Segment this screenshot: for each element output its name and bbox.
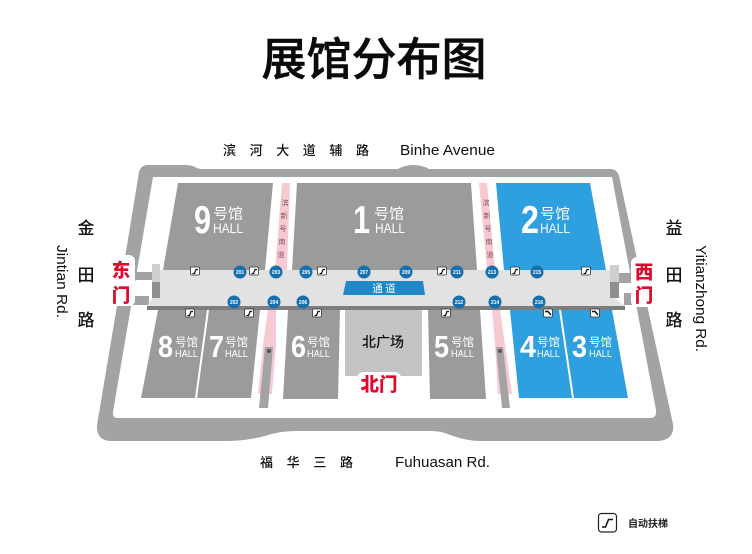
hall 2: 2 <box>521 199 539 242</box>
hall 5: HALL <box>451 349 474 360</box>
hall 5: 号馆 <box>451 334 474 350</box>
pedestrian road east: 新 <box>484 211 490 221</box>
hall 6: 号馆 <box>307 334 330 350</box>
road label: Yitianzhong Rd: 田 <box>666 261 682 286</box>
gate numbers upper row: 205 <box>302 270 310 276</box>
hall 6: 6 <box>291 329 306 364</box>
hall 8: 号馆 <box>175 334 198 350</box>
escalator icons <box>186 267 600 317</box>
gate numbers upper row <box>234 266 544 278</box>
road label: Jintian Rd: 金 <box>78 214 94 239</box>
pedestrian road west: 号 <box>280 224 286 234</box>
legend: escalator <box>598 514 668 532</box>
site interior <box>113 177 656 418</box>
gate numbers upper row: 215 <box>533 270 541 276</box>
hall 1: HALL <box>375 221 405 236</box>
east gate: 东 <box>112 257 130 283</box>
entrance block west <box>610 265 619 298</box>
site ring road <box>97 165 673 441</box>
connector east gate <box>133 272 153 305</box>
gate numbers lower row: 202 <box>230 300 238 306</box>
road label: Yitianzhong Rd: 益 <box>666 214 682 239</box>
hall 5 <box>428 310 486 399</box>
road label: Jintian Rd: Jintian Rd. <box>53 245 69 318</box>
gate numbers lower row: 216 <box>535 300 543 306</box>
east gate: 门 <box>112 282 130 308</box>
hall 6: HALL <box>307 349 330 360</box>
hall 7: HALL <box>225 349 248 360</box>
hall 2 <box>496 183 606 270</box>
road label: Yitianzhong Rd: Yitianzhong Rd. <box>692 245 708 352</box>
hall 8 <box>141 310 207 398</box>
road label: Binhe Avenue <box>223 140 495 159</box>
pedestrian road east <box>479 183 495 270</box>
road label: Binhe Avenue: Binhe Avenue <box>400 143 495 159</box>
pedestrian road west: 南 <box>278 237 286 247</box>
hall 9: 号馆 <box>213 203 243 224</box>
pedestrian road west: 新 <box>280 211 288 221</box>
pedestrian road west: 滨 <box>282 198 288 208</box>
hall 9: 9 <box>194 199 211 242</box>
ramp west <box>258 310 276 408</box>
road label: Fuhuasan Rd <box>260 452 490 471</box>
road label: Binhe Avenue: 滨 河 大 道 辅 路 <box>223 140 369 159</box>
west gate: 门 <box>635 282 653 308</box>
legend: escalator: 自动扶梯 <box>628 515 668 530</box>
gate numbers upper row: 203 <box>272 270 280 276</box>
gate numbers upper row: 209 <box>402 270 410 276</box>
gate numbers lower row: 204 <box>270 300 278 306</box>
gate numbers upper row: 201 <box>236 270 244 276</box>
hall 7: 号馆 <box>225 334 248 350</box>
hall 8: 8 <box>158 329 173 364</box>
road label: Jintian Rd: 田 <box>78 261 94 286</box>
hall 6 <box>283 310 340 399</box>
hall 1: 号馆 <box>374 203 404 224</box>
road label: Jintian Rd <box>53 214 94 331</box>
pedestrian road west: 道 <box>278 250 284 260</box>
gate numbers lower row: 214 <box>491 300 499 306</box>
entrance block east <box>152 264 160 298</box>
road label: Fuhuasan Rd: 福 华 三 路 <box>260 452 353 471</box>
hall 3: HALL <box>589 349 612 360</box>
pedestrian road west <box>275 183 290 270</box>
pedestrian road east: 滨 <box>482 198 490 208</box>
hall 1 <box>292 183 477 270</box>
gate numbers lower row: 212 <box>455 300 463 306</box>
gate numbers lower row <box>228 296 546 308</box>
east gate <box>109 255 135 308</box>
gate numbers upper row: 213 <box>488 270 496 276</box>
central concourse <box>147 270 625 310</box>
road label: Jintian Rd: 路 <box>78 306 94 331</box>
hall 1: 1 <box>353 199 370 242</box>
north plaza: 北广场 <box>362 332 404 352</box>
hall 4: 号馆 <box>537 334 560 350</box>
north gate: 北门 <box>360 371 398 397</box>
passage sign <box>343 281 425 296</box>
hall 3: 3 <box>572 329 587 364</box>
pedestrian road east: 道 <box>486 250 494 260</box>
gate numbers upper row: 207 <box>360 270 368 276</box>
hall 5: 5 <box>434 329 449 364</box>
ramp east <box>492 310 512 408</box>
hall 4 <box>510 310 572 398</box>
hall 2: 号馆 <box>540 203 570 224</box>
hall 4: 4 <box>520 329 537 364</box>
hall 9 <box>163 183 273 270</box>
hall 9: HALL <box>213 221 243 236</box>
road label: Yitianzhong Rd <box>666 214 708 352</box>
hall 3 <box>561 310 628 398</box>
hall 7 <box>197 310 260 398</box>
pedestrian road east: 号 <box>484 224 492 234</box>
hall 8: HALL <box>175 349 198 360</box>
hall 3: 号馆 <box>589 334 612 350</box>
road label: Yitianzhong Rd: 路 <box>666 306 682 331</box>
hall 2: HALL <box>540 221 570 236</box>
west gate: 西 <box>635 259 653 285</box>
pedestrian road east: 南 <box>486 237 492 247</box>
hall 4: HALL <box>537 349 560 360</box>
west gate <box>631 257 657 308</box>
passage sign: 通 道 <box>372 281 396 296</box>
north plaza <box>345 310 422 376</box>
hall 7: 7 <box>209 329 224 364</box>
connector west gate <box>618 273 632 305</box>
gate numbers upper row: 211 <box>453 270 461 276</box>
road label: Fuhuasan Rd: Fuhuasan Rd. <box>395 455 490 471</box>
title: 展馆分布图 <box>261 23 487 88</box>
gate numbers lower row: 206 <box>299 300 307 306</box>
